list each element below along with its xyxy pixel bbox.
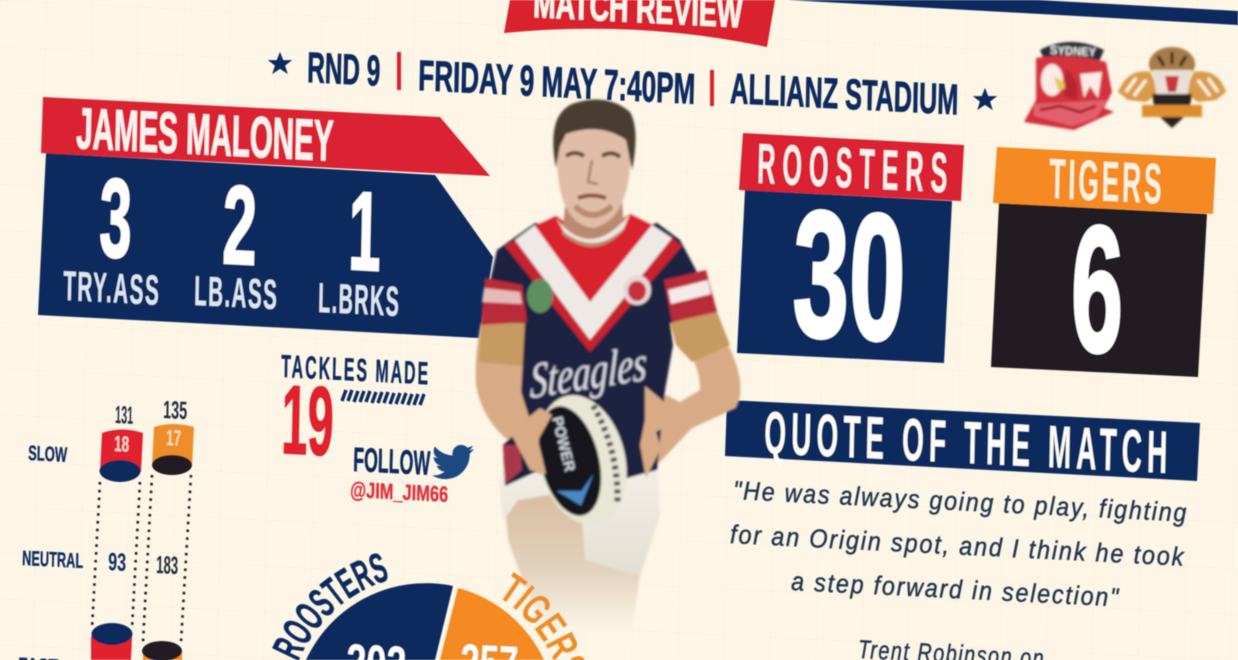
badges <box>527 279 553 313</box>
roosters cylinder: 18 <box>114 431 129 457</box>
icon: tigers logo <box>1118 47 1226 128</box>
panel: james maloney stats: L.BRKS <box>318 274 401 325</box>
rugby ball <box>524 386 640 534</box>
chart: possession cylinders <box>18 396 194 660</box>
roosters cylinder: 131 <box>115 401 133 430</box>
panel: roosters score <box>737 132 964 380</box>
panel: james maloney stats: LB.ASS <box>194 267 279 318</box>
follow twitter: @JIM_JIM66 <box>350 477 448 507</box>
tigers cylinder: 135 <box>163 396 187 425</box>
quote text: "He was always going to play, fighting <box>733 475 1188 528</box>
follow twitter: FOLLOW <box>353 441 431 483</box>
legs <box>503 480 655 630</box>
panel: tigers score <box>991 147 1216 392</box>
quote text: for an Origin spot, and I think he took <box>730 519 1185 572</box>
panel: tigers score: 6 <box>1069 188 1125 392</box>
follow twitter <box>350 441 474 507</box>
top right navy stripe <box>788 0 1238 25</box>
stat: line breaks <box>318 168 401 325</box>
jersey <box>481 223 717 486</box>
hands <box>510 408 552 474</box>
sleeves <box>481 278 527 325</box>
player photo: james maloney <box>476 100 740 630</box>
stat: line break assists <box>194 162 279 318</box>
match details line: ALLIANZ STADIUM <box>730 65 959 124</box>
face features <box>566 153 620 215</box>
panel: roosters score: 30 <box>791 173 907 380</box>
tackles made stat: 19 <box>281 364 335 477</box>
rugby ball: POWER <box>548 415 578 473</box>
roosters cylinder: 93 <box>108 548 126 577</box>
text: TACKLES MADE <box>281 348 431 391</box>
hair <box>553 100 636 170</box>
upper arms <box>476 322 552 478</box>
stat: try assists <box>63 155 161 314</box>
quote text <box>730 475 1188 660</box>
stat: line breaks: 1 <box>348 168 382 295</box>
row labels: SLOW <box>28 442 67 467</box>
panel: james maloney stats <box>38 96 493 338</box>
sponsor: Steagles <box>530 334 647 409</box>
match details line: FRIDAY 9 MAY 7:40PM <box>418 52 696 114</box>
row labels: NEUTRAL <box>22 547 83 573</box>
chevrons <box>505 238 682 352</box>
shorts <box>500 466 660 576</box>
stat: line break assists: 2 <box>222 162 258 289</box>
neck <box>562 200 624 247</box>
tigers cylinder: 183 <box>156 551 178 580</box>
tackles made stat <box>281 348 431 477</box>
player name: JAMES MALONEY <box>76 96 334 174</box>
head <box>557 112 631 228</box>
match details line <box>269 44 996 124</box>
roosters cylinder <box>91 401 143 660</box>
quote text: a step forward in selection" <box>791 566 1120 612</box>
icon: roosters logo <box>1024 42 1114 130</box>
text: ROOSTERS <box>757 132 955 206</box>
panel: james maloney stats: TRY.ASS <box>63 262 161 314</box>
chart: semi-circle team comparison <box>272 552 586 660</box>
tigers cylinder <box>142 396 194 660</box>
panel: quote of the match <box>725 399 1200 660</box>
stat: try assists: 3 <box>99 155 133 282</box>
row labels <box>18 442 83 660</box>
icon: roosters logo: SYDNEY <box>1050 43 1096 59</box>
match details line: RND 9 <box>307 44 381 96</box>
banner: match review <box>504 0 775 47</box>
icon: twitter bird <box>432 445 474 479</box>
tigers cylinder: 17 <box>166 425 181 451</box>
